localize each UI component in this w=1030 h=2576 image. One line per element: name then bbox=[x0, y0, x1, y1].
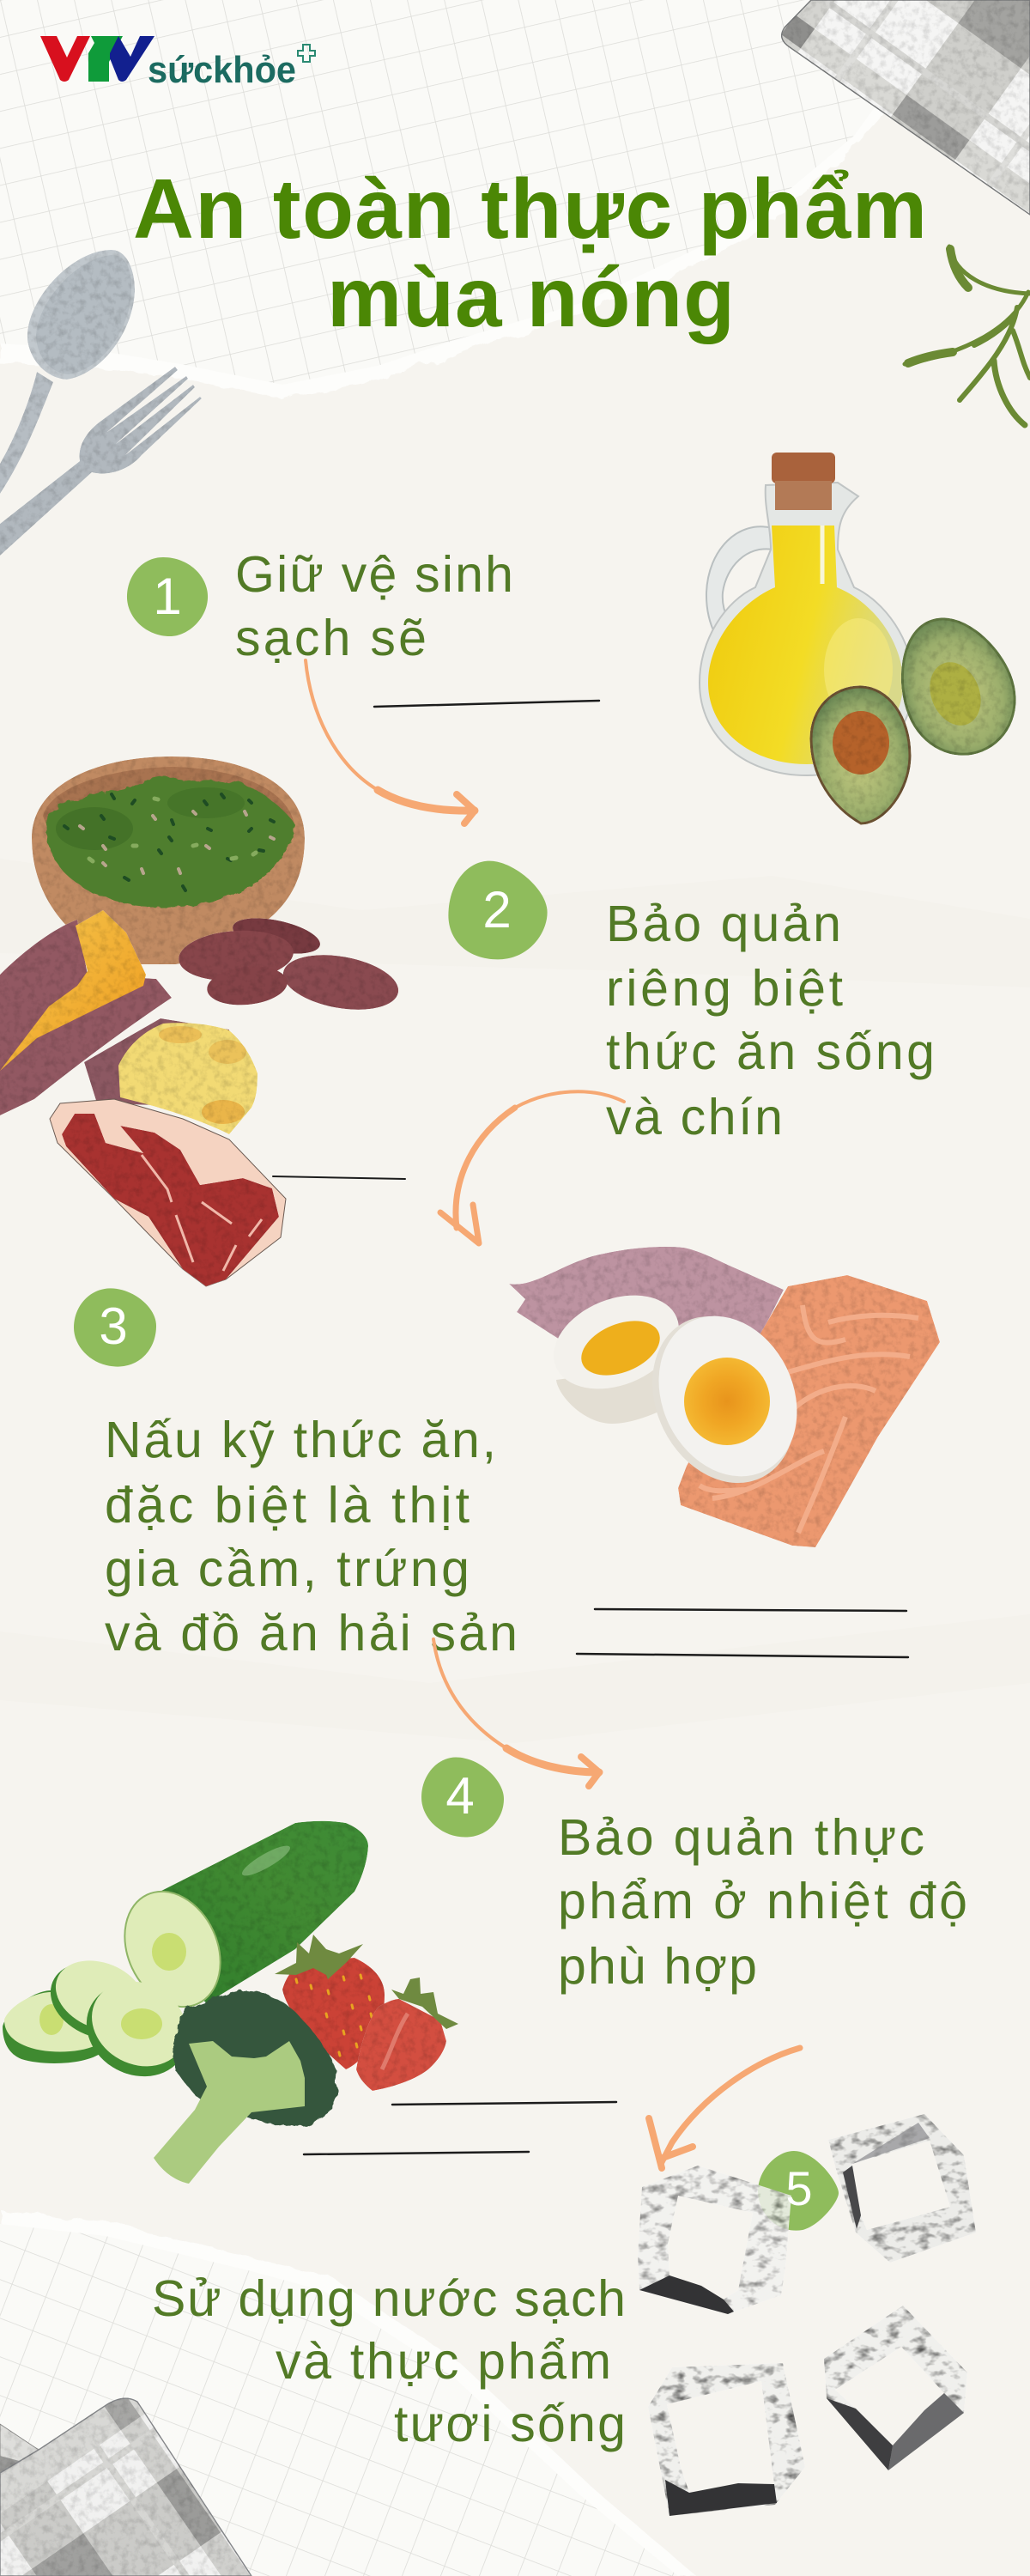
divider line bbox=[392, 2102, 616, 2105]
step 2 text: riêng biệt bbox=[606, 960, 843, 1017]
step 2 text bbox=[606, 896, 935, 1145]
step 3 text: gia cầm, trứng bbox=[105, 1540, 470, 1597]
panel: top grid paper bbox=[0, 0, 893, 399]
step 4 text: Bảo quản thực bbox=[558, 1809, 924, 1866]
step 2 text: và chín bbox=[606, 1089, 783, 1145]
divider line bbox=[273, 1176, 405, 1179]
step 1 text: Giữ vệ sinh bbox=[235, 546, 513, 603]
logo: VTV sức khỏe: sứckhỏe bbox=[148, 49, 296, 91]
step 3 number badge bbox=[74, 1288, 156, 1367]
step 5 text: và thực phẩm bbox=[276, 2333, 611, 2390]
step 1 number badge: 1 bbox=[153, 568, 182, 625]
step 4 text bbox=[558, 1809, 967, 1995]
step 5 text: Sử dụng nước sạch bbox=[152, 2270, 626, 2327]
illustration: ice cube 1 bbox=[638, 2166, 791, 2314]
step 3 text: và đồ ăn hải sản bbox=[105, 1605, 518, 1662]
icon: spoon bbox=[0, 250, 135, 494]
logo: VTV sức khỏe bbox=[40, 36, 315, 91]
step 5 text: tươi sống bbox=[394, 2396, 626, 2452]
step 1 number badge bbox=[127, 557, 208, 636]
step 3 text: Nấu kỹ thức ăn, bbox=[105, 1412, 496, 1468]
illustration: beans bbox=[177, 912, 403, 1018]
step 4 text: phù hợp bbox=[558, 1938, 757, 1995]
panel: bottom grid paper bbox=[0, 2209, 696, 2576]
illustration: ice cube 2 bbox=[828, 2114, 976, 2263]
icon: fork bbox=[0, 367, 202, 556]
step 2 number badge: 2 bbox=[482, 881, 512, 939]
divider line bbox=[374, 701, 599, 707]
illustration: sweet potatoes bbox=[0, 910, 258, 1134]
step 3 text bbox=[105, 1412, 518, 1662]
step 3 text: đặc biệt là thịt bbox=[105, 1477, 470, 1534]
illustration: broccoli bbox=[154, 1990, 336, 2184]
step 2 text: Bảo quản bbox=[606, 896, 841, 952]
arrow: step 4 to step 5 bbox=[649, 2048, 800, 2168]
title: An toàn thực phẩm bbox=[133, 161, 927, 256]
illustration: bowl of greens bbox=[32, 756, 305, 964]
step 3 number badge: 3 bbox=[99, 1297, 128, 1355]
illustration: olive oil bottle bbox=[700, 453, 913, 775]
step 5 number badge bbox=[758, 2151, 839, 2231]
illustration: raw meat bbox=[50, 1099, 286, 1286]
icon: checkered cloth bottom left bbox=[0, 2398, 251, 2576]
icon: rosemary sprig bbox=[905, 246, 1030, 425]
arrow: step 1 to step 2 bbox=[306, 660, 475, 823]
divider line bbox=[595, 1609, 906, 1611]
step 5 number: 5 bbox=[785, 2161, 813, 2215]
illustration: boiled eggs bbox=[540, 1278, 823, 1507]
step 5 text bbox=[152, 2270, 626, 2452]
step 4 number badge: 4 bbox=[445, 1767, 475, 1825]
arrow: step 3 to step 4 bbox=[433, 1639, 599, 1786]
title: mùa nóng bbox=[327, 250, 735, 344]
step 4 number badge bbox=[421, 1757, 504, 1838]
step 1 text: sạch sẽ bbox=[235, 610, 427, 666]
arrow: step 2 to step 3 bbox=[440, 1091, 624, 1243]
step 4 text: phẩm ở nhiệt độ bbox=[558, 1873, 967, 1929]
title bbox=[133, 161, 927, 344]
step 2 number badge bbox=[448, 861, 548, 959]
divider line bbox=[304, 2152, 529, 2154]
illustration: salmon fillet bbox=[678, 1275, 940, 1547]
step 1 text bbox=[235, 546, 513, 666]
divider line bbox=[577, 1654, 908, 1657]
illustration: purple sweet potato piece bbox=[509, 1247, 784, 1346]
illustration: ice cube 3 bbox=[648, 2363, 805, 2516]
illustration: ice cube 4 bbox=[824, 2306, 967, 2470]
step 2 text: thức ăn sống bbox=[606, 1024, 935, 1080]
icon: checkered cloth top right bbox=[782, 0, 1030, 215]
illustration: strawberries bbox=[275, 1935, 458, 2091]
illustration: avocado halves bbox=[811, 601, 1030, 823]
illustration: cucumber bbox=[3, 1821, 368, 2094]
